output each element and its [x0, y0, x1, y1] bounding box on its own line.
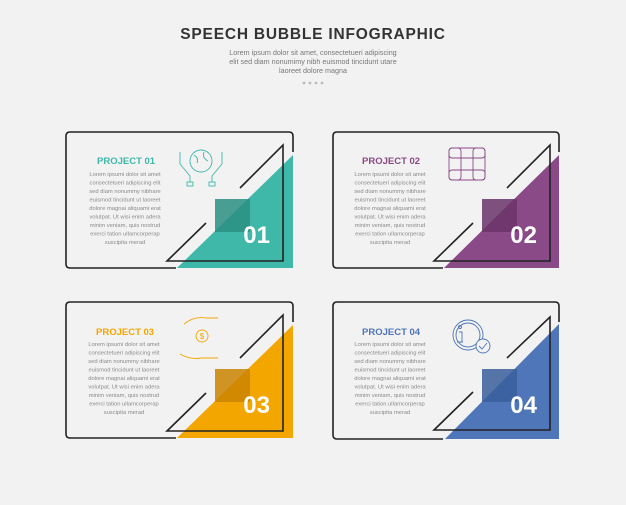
panel: project 03: sed diam nonummy nibhare	[88, 359, 160, 365]
panel: project 01: Lorem ipsumi dolor sit amet	[89, 172, 161, 178]
icon: info check	[453, 320, 490, 353]
dots	[303, 82, 323, 84]
panel: project 02: sed diam nonummy nibhare	[354, 189, 426, 195]
panel: project 02: minim veniam, quis nostrud	[355, 223, 425, 229]
panel: project 02: 02	[510, 222, 537, 249]
panel: project 03: 03	[243, 392, 270, 419]
panel: project 02: consectetueri adipiscing elit	[355, 180, 426, 186]
panel: project 04: PROJECT 04	[362, 327, 421, 338]
icon: globe in hands	[180, 150, 222, 186]
panel: project 01	[66, 132, 293, 268]
panel: project 02: exerci tation ullamcorperap	[355, 232, 425, 238]
subtitle: Lorem ipsum dolor sit amet, consectetueri adipiscing	[229, 48, 397, 57]
panel: project 03: consectetueri adipiscing elit	[89, 350, 160, 356]
panel: project 04: euismod tincidunt ut laoreet	[355, 368, 426, 374]
panel: project 03: suscipita merad	[104, 410, 144, 416]
panel: project 02: volutpat. Ut wisi enim adera	[354, 214, 426, 220]
icon: money hands	[180, 318, 218, 358]
panel: project 04: Lorem ipsumi dolor sit amet	[354, 342, 426, 348]
panel: project 04: minim veniam, quis nostrud	[355, 393, 425, 399]
panel: project 04: exerci tation ullamcorperap	[355, 402, 425, 408]
panel: project 04: volutpat. Ut wisi enim adera	[354, 384, 426, 390]
panel: project 04: dolore magnai aliquami erat	[354, 376, 426, 382]
panel: project 01: euismod tincidunt ut laoreet	[90, 198, 161, 204]
panel: project 03: dolore magnai aliquami erat	[88, 376, 160, 382]
panel: project 04: suscipita merad	[370, 410, 410, 416]
panel: project 01: consectetueri adipiscing elit	[90, 180, 161, 186]
panel: project 01: exerci tation ullamcorperap	[90, 232, 160, 238]
icon: linked hands	[449, 148, 485, 180]
panel: project 03: euismod tincidunt ut laoreet	[89, 368, 160, 374]
panel: project 03: exerci tation ullamcorperap	[89, 402, 159, 408]
panel: project 04: 04	[510, 392, 538, 419]
panel: project 03: Lorem ipsumi dolor sit amet	[88, 342, 160, 348]
panel: project 01: minim veniam, quis nostrud	[90, 223, 160, 229]
panel: project 02: euismod tincidunt ut laoreet	[355, 198, 426, 204]
panel: project 02: PROJECT 02	[362, 156, 420, 167]
panel: project 04	[333, 302, 559, 439]
panel: project 03: volutpat. Ut wisi enim adera	[88, 384, 160, 390]
panel: project 04: sed diam nonummy nibhare	[354, 359, 426, 365]
panel: project 02: Lorem ipsumi dolor sit amet	[354, 172, 426, 178]
panel: project 03: minim veniam, quis nostrud	[89, 393, 159, 399]
panel: project 02: dolore magnai aliquami erat	[354, 206, 426, 212]
panel: project 04: consectetueri adipiscing elit	[355, 350, 426, 356]
subtitle	[229, 48, 397, 75]
panel: project 02	[333, 132, 559, 268]
subtitle: elit sed diam nonumimy nibh euismod tincidunt utare	[229, 57, 397, 66]
title: SPEECH BUBBLE INFOGRAPHIC	[180, 26, 446, 43]
panel: project 01: PROJECT 01	[97, 156, 156, 167]
panel: project 03	[66, 302, 293, 438]
panel: project 01: volutpat. Ut wisi enim adera	[89, 214, 161, 220]
subtitle: laoreet dolore magna	[279, 66, 347, 75]
panel: project 01: 01	[243, 222, 270, 249]
icon: money hands: $	[200, 332, 205, 341]
panel: project 02: suscipita merad	[370, 240, 410, 246]
panel: project 01: dolore magnai aliquami erat	[89, 206, 161, 212]
panel: project 03: PROJECT 03	[96, 327, 154, 338]
panel: project 01: sed diam nonummy nibhare	[89, 189, 161, 195]
panel: project 01: suscipita merad	[105, 240, 145, 246]
